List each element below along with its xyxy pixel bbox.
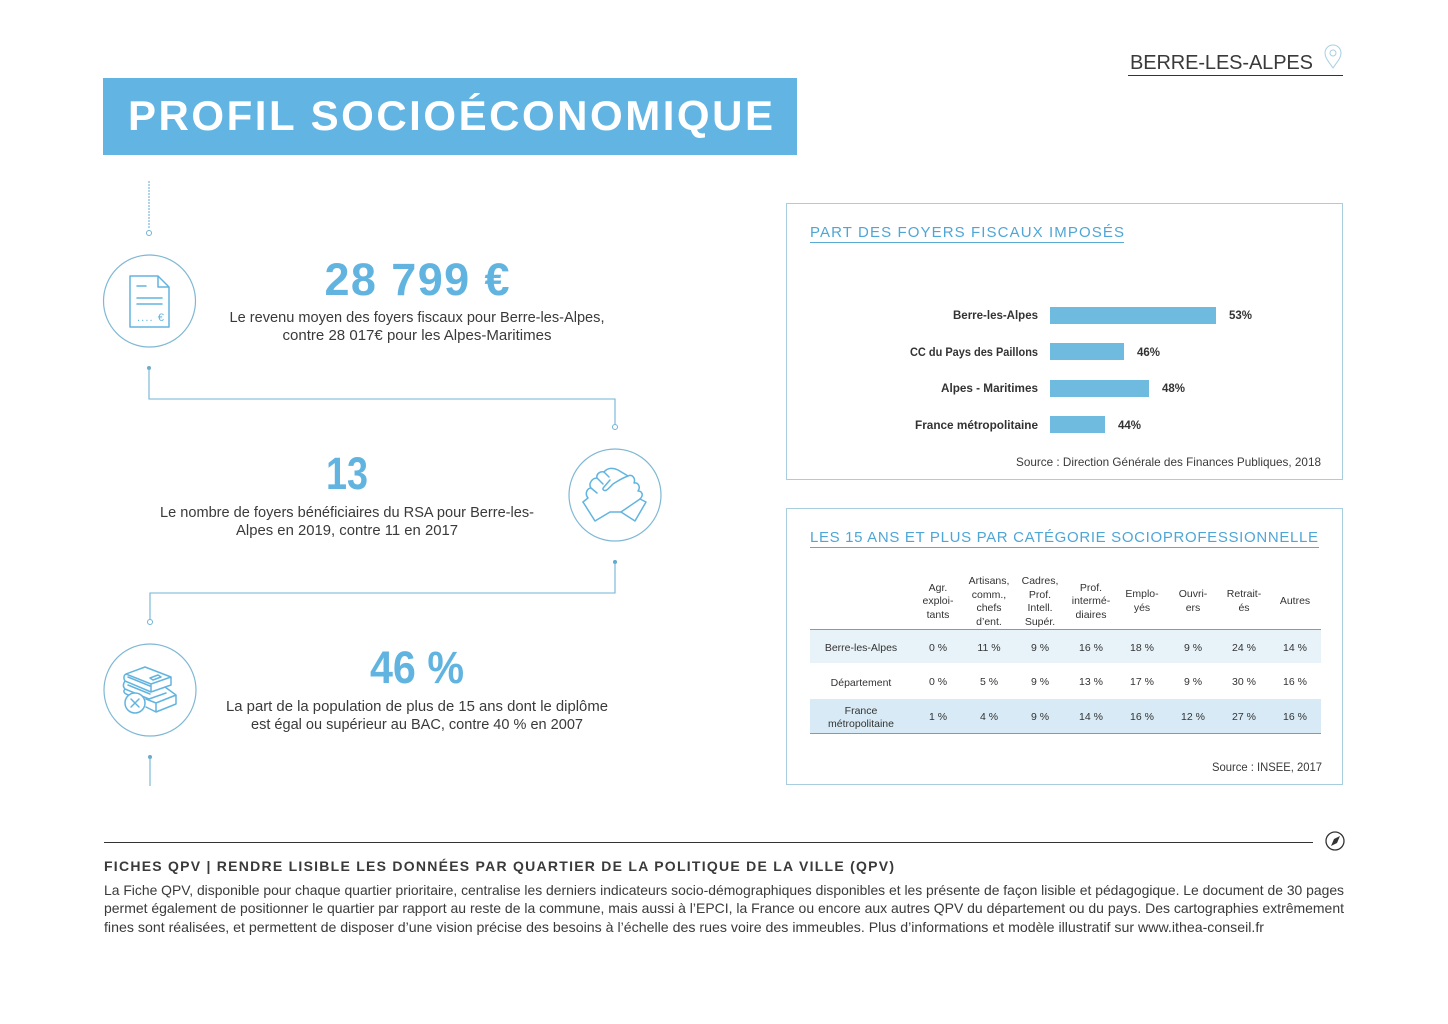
data table: 30 %: [1232, 676, 1256, 688]
stat: revenue: contre 28 017€ pour les Alpes-Maritimes: [282, 327, 552, 344]
data table: Agr.: [929, 582, 947, 594]
data table: 27 %: [1232, 711, 1256, 723]
data table: 16 %: [1283, 676, 1307, 688]
data table: comm.,: [972, 589, 1006, 601]
data table: Cadres,: [1022, 575, 1058, 587]
data table: 9 %: [1031, 676, 1049, 688]
data table: 14 %: [1079, 711, 1103, 723]
data table: 9 %: [1031, 642, 1049, 654]
title banner: [103, 78, 797, 155]
stat: diploma share: [226, 642, 608, 733]
bar chart: 46%: [1137, 347, 1160, 359]
data table: Supér.: [1025, 616, 1055, 628]
bar chart: [910, 307, 1252, 433]
data table: Autres: [1280, 595, 1310, 607]
stat: RSA households: 13: [326, 448, 368, 499]
title banner: PROFIL SOCIOÉCONOMIQUE: [128, 92, 773, 139]
data table: Intell.: [1027, 602, 1053, 614]
stat: RSA households: [160, 448, 534, 539]
data table: Artisans,: [969, 575, 1009, 587]
data table: Berre-les-Alpes: [825, 642, 897, 654]
location header: BERRE-LES-ALPES: [1130, 52, 1313, 74]
icon: handshake: [569, 449, 661, 541]
bar chart: 44%: [1118, 420, 1141, 432]
data table: 4 %: [980, 711, 998, 723]
data table: 18 %: [1130, 642, 1154, 654]
data table: diaires: [1076, 609, 1106, 621]
footer text: La Fiche QPV, disponible pour chaque quartier prioritaire, centralise les derniers indicateurs socio-démographiques disponibles et les présente de façon lisible et pédagogique. Le document de 30 pages: [104, 882, 1344, 898]
footer heading: FICHES QPV | RENDRE LISIBLE LES DONNÉES PAR QUARTIER DE LA POLITIQUE DE LA VILLE (QPV): [104, 858, 894, 874]
bar chart: 53%: [1229, 310, 1252, 322]
stat: diploma share: est égal ou supérieur au BAC, contre 40 % en 2007: [251, 716, 583, 733]
timeline connector: [146, 181, 618, 786]
data table: 12 %: [1181, 711, 1205, 723]
data table: France: [845, 705, 877, 717]
data table: 16 %: [1079, 642, 1103, 654]
data table: tants: [927, 609, 949, 621]
data table: 0 %: [929, 642, 947, 654]
data table: 1 %: [929, 711, 947, 723]
bar chart: CC du Pays des Paillons: [910, 347, 1038, 359]
footer text: fines sont réalisées, et permettent de disposer d’une vision précise des besoins à l’échelle des rues voire des immeubles. Plus d’informations et modèle illustratif sur www.ithea-conseil.fr: [104, 919, 1264, 935]
stat: diploma share: 46 %: [370, 642, 464, 693]
source note: Source : INSEE, 2017: [1212, 760, 1322, 774]
data table: és: [1238, 602, 1250, 614]
data table: d’ent.: [976, 616, 1002, 628]
icon: books with cross: [104, 644, 196, 736]
data table: 9 %: [1031, 711, 1049, 723]
data table: métropolitaine: [828, 718, 894, 730]
data table: 0 %: [929, 676, 947, 688]
stat: revenue: 28 799 €: [324, 254, 510, 305]
data table: Département: [831, 677, 891, 689]
bar chart: Alpes - Maritimes: [941, 383, 1038, 395]
data table: 9 %: [1184, 676, 1202, 688]
data table: Retrait-: [1227, 588, 1262, 600]
panel: socio-professional categories: [786, 508, 1342, 784]
stat: diploma share: La part de la population de plus de 15 ans dont le diplôme: [226, 698, 608, 715]
bar chart: Berre-les-Alpes: [953, 310, 1038, 322]
data table: Ouvri-: [1179, 588, 1208, 600]
data table: 16 %: [1283, 711, 1307, 723]
data table: 13 %: [1079, 676, 1103, 688]
data table: ers: [1186, 602, 1200, 614]
data table: exploi-: [923, 595, 954, 607]
source note: Source : Direction Générale des Finances Publiques, 2018: [1016, 455, 1321, 469]
stat: RSA households: Alpes en 2019, contre 11 en 2017: [236, 522, 458, 539]
data table: 11 %: [977, 642, 1001, 654]
stat: revenue: [230, 254, 604, 344]
data table: [810, 575, 1321, 734]
stat: revenue: Le revenu moyen des foyers fiscaux pour Berre-les-Alpes,: [230, 309, 604, 326]
data table: 5 %: [980, 676, 998, 688]
data table: Emplo-: [1125, 588, 1159, 600]
data table: chefs: [976, 602, 1002, 614]
bar chart: 48%: [1162, 383, 1185, 395]
footer text: permet également de positionner le quartier par rapport au reste de la commune, mais aussi à l’EPCI, la France ou encore aux autres QPV du département ou du pays. Des cartographies extrêmement: [104, 900, 1344, 916]
icon: tax document: .... €: [137, 312, 164, 324]
bar chart: France métropolitaine: [915, 420, 1038, 432]
heading: socio-professional categories: LES 15 ANS ET PLUS PAR CATÉGORIE SOCIOPROFESSIONNELLE: [810, 529, 1318, 546]
data table: yés: [1134, 602, 1150, 614]
footer divider with compass icon: [104, 832, 1344, 850]
data table: 14 %: [1283, 642, 1307, 654]
data table: intermé-: [1072, 595, 1111, 607]
data table: 16 %: [1130, 711, 1154, 723]
stat: RSA households: Le nombre de foyers bénéficiaires du RSA pour Berre-les-: [160, 504, 534, 521]
data table: Prof.: [1029, 589, 1051, 601]
footer text: [104, 882, 1344, 935]
heading: taxed households: PART DES FOYERS FISCAUX IMPOSÉS: [810, 224, 1124, 241]
icon: tax document: [104, 255, 196, 347]
data table: 24 %: [1232, 642, 1256, 654]
data table: 9 %: [1184, 642, 1202, 654]
panel: taxed households: [786, 204, 1342, 480]
location header: [1128, 45, 1343, 76]
data table: Prof.: [1080, 582, 1102, 594]
data table: 17 %: [1130, 676, 1154, 688]
